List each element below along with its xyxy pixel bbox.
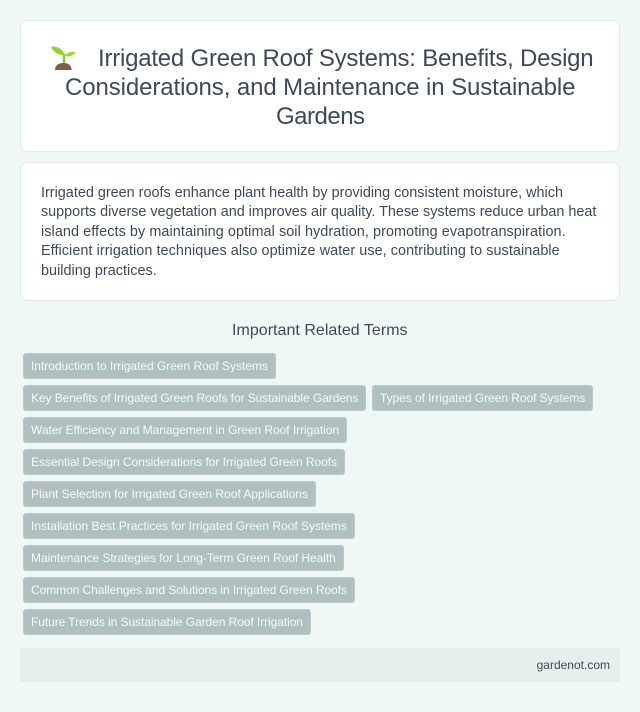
summary text: Irrigated green roofs enhance plant health by providing consistent moisture, which xyxy=(41,185,563,201)
tag xyxy=(23,577,355,603)
summary text: supports diverse vegetation and improves air quality. These systems reduce urban heat xyxy=(41,204,596,220)
title: Considerations, and Maintenance in Sustainable xyxy=(65,74,575,101)
tag xyxy=(23,353,276,379)
tag xyxy=(372,385,593,411)
tag xyxy=(23,417,347,443)
tag xyxy=(23,481,316,507)
title: Irrigated Green Roof Systems: Benefits, Design xyxy=(98,45,593,72)
tag: Key Benefits of Irrigated Green Roofs for Sustainable Gardens xyxy=(31,391,358,405)
tag xyxy=(23,449,345,475)
tag xyxy=(23,513,355,539)
tag list xyxy=(23,353,593,635)
tag xyxy=(23,385,366,411)
panel: title card xyxy=(20,20,620,152)
tag: Installation Best Practices for Irrigated Green Roof Systems xyxy=(31,519,347,533)
summary text: island effects by maintaining optimal soil hydration, promoting evapotranspiration. xyxy=(41,224,566,240)
summary text: building practices. xyxy=(41,263,157,279)
tag: Plant Selection for Irrigated Green Roof Applications xyxy=(31,487,308,501)
tag: Future Trends in Sustainable Garden Roof Irrigation xyxy=(31,615,303,629)
tag xyxy=(23,545,344,571)
footer bar xyxy=(20,648,620,682)
summary text xyxy=(41,185,596,279)
tag: Essential Design Considerations for Irrigated Green Roofs xyxy=(31,455,337,469)
tag: Introduction to Irrigated Green Roof Systems xyxy=(31,359,268,373)
tag: Types of Irrigated Green Roof Systems xyxy=(380,391,585,405)
icon: seedling xyxy=(51,46,76,70)
title: Gardens xyxy=(276,103,365,130)
summary text: Efficient irrigation techniques also optimize water use, contributing to sustainable xyxy=(41,243,560,259)
panel: summary card xyxy=(20,162,620,301)
heading: important related terms: Important Related Terms xyxy=(232,322,408,339)
title xyxy=(65,45,593,130)
tag: Common Challenges and Solutions in Irrigated Green Roofs xyxy=(31,583,347,597)
footer source: gardenot.com xyxy=(537,658,610,672)
tag xyxy=(23,609,311,635)
tag: Maintenance Strategies for Long-Term Green Roof Health xyxy=(31,551,336,565)
tag: Water Efficiency and Management in Green Roof Irrigation xyxy=(31,423,339,437)
